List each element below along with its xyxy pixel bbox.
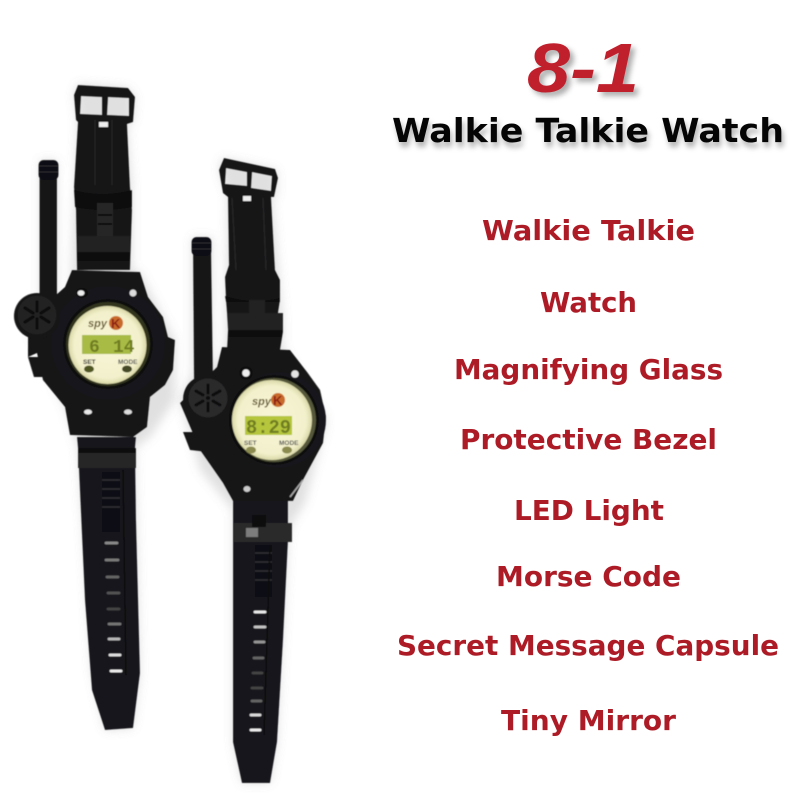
buttons: [83, 359, 138, 372]
lower strap: [233, 497, 292, 783]
LCD display: 8:29: [246, 417, 291, 439]
antenna: [38, 160, 58, 308]
LCD display: [82, 335, 135, 358]
feature: Protective Bezel: Protective Bezel: [460, 423, 717, 456]
right watch: [180, 158, 327, 783]
left watch: [14, 84, 175, 730]
title: 8-1: 8-1: [527, 29, 639, 107]
antenna: [192, 237, 213, 380]
LCD display: 6: [89, 338, 100, 358]
subtitle: Walkie Talkie Watch: Walkie Talkie Watch: [394, 116, 786, 155]
lower strap: [77, 437, 140, 730]
speaker grille: [183, 375, 231, 423]
feature: Walkie Talkie: Walkie Talkie: [482, 214, 695, 247]
feature: Tiny Mirror: Tiny Mirror: [501, 704, 676, 737]
watch case: [28, 270, 175, 437]
logo: K: [111, 316, 121, 331]
logo: [252, 393, 285, 408]
upper strap and buckle: [219, 158, 283, 350]
strap holes: [106, 543, 121, 671]
upper strap and buckle: [74, 85, 135, 270]
buttons: [244, 440, 299, 454]
title: 8-1: 8-1: [531, 33, 643, 111]
subtitle: Walkie Talkie Watch: Walkie Talkie Watch: [392, 111, 784, 150]
watch face: [232, 380, 312, 460]
logo: spy: [88, 318, 108, 330]
buttons: MODE: [118, 359, 138, 366]
buttons: MODE: [279, 440, 299, 447]
logo: spy: [252, 396, 272, 408]
buttons: SET: [83, 359, 96, 366]
strap holes: [251, 612, 265, 730]
LCD display: 14: [113, 338, 135, 358]
feature: LED Light: LED Light: [514, 494, 664, 527]
logo: [88, 316, 123, 331]
logo: K: [273, 393, 283, 408]
buttons: SET: [244, 440, 257, 447]
feature: Morse Code: Morse Code: [496, 560, 681, 593]
feature: Magnifying Glass: Magnifying Glass: [454, 353, 723, 386]
feature: Secret Message Capsule: Secret Message Capsule: [397, 629, 779, 662]
speaker grille: [14, 293, 60, 339]
feature list: [397, 214, 779, 737]
feature: Watch: Watch: [540, 286, 637, 319]
watch face: [68, 306, 146, 384]
watch case: [180, 347, 326, 501]
